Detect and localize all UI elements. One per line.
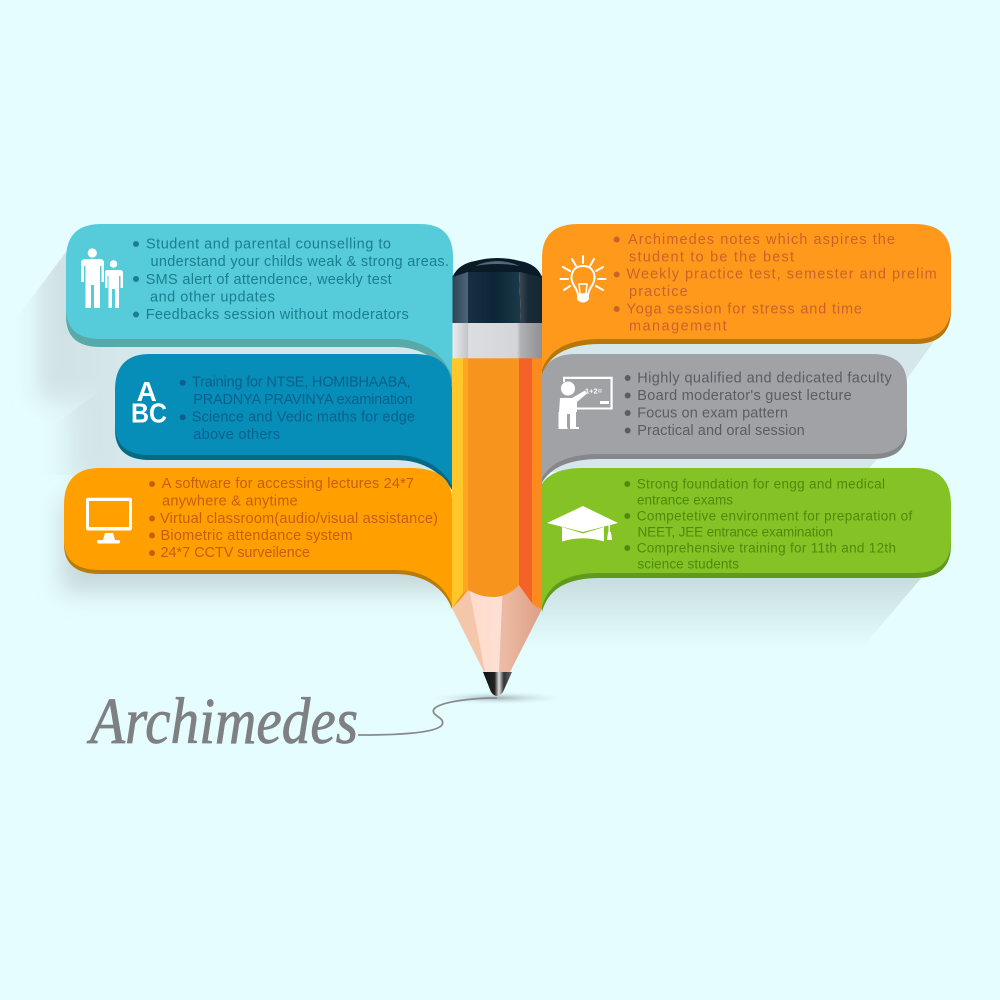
text: training list: Science and Vedic maths for edge — [192, 410, 415, 426]
icon: teacher at board — [558, 377, 613, 429]
text: foundation list: Competetive environment for preparation of — [637, 508, 913, 523]
text: software list — [149, 476, 438, 561]
icon: parent and child — [81, 248, 123, 308]
icon: monitor — [86, 498, 132, 544]
text: foundation list: Strong foundation for engg and medical — [637, 476, 885, 491]
text: notes list: student to be the best — [629, 249, 794, 265]
text: foundation list: NEET, JEE entrance examination — [638, 524, 833, 539]
text: training list — [180, 375, 415, 443]
text: counselling list — [133, 236, 449, 323]
text: software list: Virtual classroom(audio/visual assistance) — [160, 511, 438, 527]
text: counselling list: and other updates — [150, 290, 275, 306]
text: counselling list: understand your childs weak & strong areas. — [150, 254, 449, 270]
text: training list: above others — [193, 427, 280, 443]
pencil — [452, 258, 542, 696]
text: notes list: Archimedes notes which aspires the — [628, 232, 895, 248]
pencil wood cone — [452, 580, 542, 672]
icon: ABC letters: A — [137, 376, 157, 407]
panel: blue training — [115, 354, 452, 490]
pencil metal band — [452, 323, 542, 358]
pencil cap — [452, 258, 542, 323]
text: foundation list — [624, 476, 913, 571]
icon: ABC letters — [131, 376, 167, 429]
text: faculty list — [625, 371, 892, 439]
text: software list: Biometric attendance system — [160, 528, 353, 544]
panel: orange software — [64, 468, 452, 609]
text: notes list: management — [629, 319, 727, 335]
text: counselling list: Student and parental counselling to — [146, 236, 391, 252]
icon: light bulb — [560, 256, 606, 302]
icon: ABC letters: BC — [131, 398, 167, 429]
text: faculty list: Board moderator's guest lecture — [637, 388, 852, 404]
text: training list: Training for NTSE, HOMIBHAABA, — [192, 375, 411, 391]
text: foundation list: entrance exams — [637, 492, 733, 507]
text: foundation list: Comprehensive training for 11th and 12th — [637, 540, 896, 555]
text: faculty list: Highly qualified and dedicated faculty — [637, 371, 892, 387]
pencil drawn line — [358, 698, 497, 735]
text: notes list — [614, 232, 937, 335]
panel: green foundation — [542, 468, 951, 612]
long panel shadows — [38, 240, 935, 648]
pencil tip ground shadow — [425, 691, 569, 705]
panel: cyan counselling — [66, 224, 453, 388]
icon: graduation cap — [547, 506, 618, 542]
panel: gray faculty — [540, 354, 907, 487]
text: software list: 24*7 CCTV surveilence — [160, 545, 310, 561]
text: counselling list: Feedbacks session without moderators — [146, 307, 409, 323]
icon: teacher at board: 1+2= — [585, 386, 603, 396]
text: foundation list: science students — [638, 556, 739, 571]
text: counselling list: SMS alert of attendence, weekly test — [146, 272, 392, 288]
panel: orange notes — [542, 224, 951, 375]
text: faculty list: Focus on exam pattern — [637, 405, 788, 421]
text: notes list: Yoga session for stress and time — [626, 301, 862, 317]
text: software list: anywhere & anytime — [162, 494, 298, 510]
pencil body — [452, 358, 542, 609]
text: software list: A software for accessing lectures 24*7 — [162, 476, 414, 492]
pencil lead tip — [483, 672, 512, 696]
text: notes list: Weekly practice test, semester and prelim — [626, 267, 937, 283]
text: training list: PRADNYA PRAVINYA examination — [193, 392, 413, 408]
text: notes list: practice — [629, 284, 688, 300]
signature: Archimedes: Archimedes — [87, 685, 358, 758]
text: faculty list: Practical and oral session — [637, 423, 805, 439]
